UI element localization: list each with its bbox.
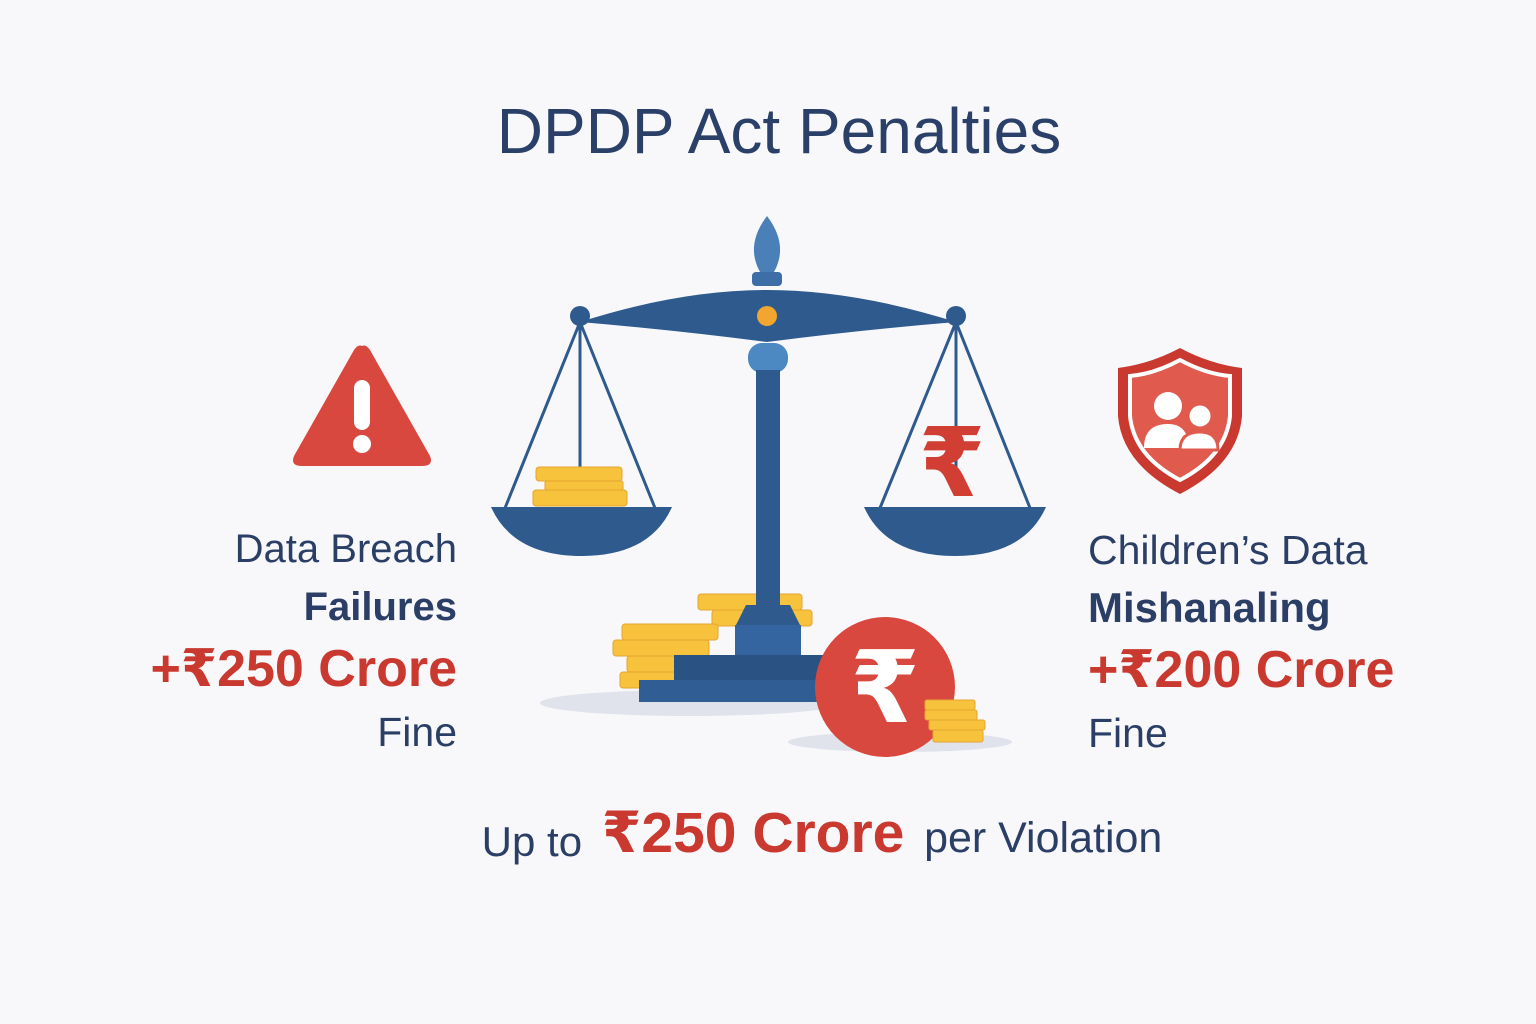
text block: children's data: Mishanaling	[1088, 584, 1331, 631]
coins behind base	[613, 594, 812, 688]
text block: children's data: Children’s Data	[1088, 527, 1368, 573]
text block: data breach: Data Breach	[235, 527, 457, 571]
text block: data breach	[151, 527, 457, 755]
text block: data breach: +₹250 Crore	[151, 640, 457, 698]
icon: shield with people	[1118, 348, 1242, 494]
icon: warning triangle	[293, 346, 431, 466]
text block: children's data	[1088, 527, 1394, 756]
text block: data breach: Failures	[304, 585, 457, 629]
rupee in right pan: ₹	[919, 410, 985, 517]
text block: children's data: Fine	[1088, 710, 1168, 756]
red rupee coin	[815, 617, 955, 757]
stand	[754, 216, 780, 272]
text block: children's data: +₹200 Crore	[1088, 641, 1394, 699]
left pan	[505, 322, 1030, 508]
title: DPDP Act Penalties	[497, 95, 1061, 167]
scale illustration: ₹	[850, 632, 920, 744]
bottom summary: Up to ₹250 Crore per Violation	[482, 801, 1162, 865]
text block: data breach: Fine	[377, 709, 457, 755]
